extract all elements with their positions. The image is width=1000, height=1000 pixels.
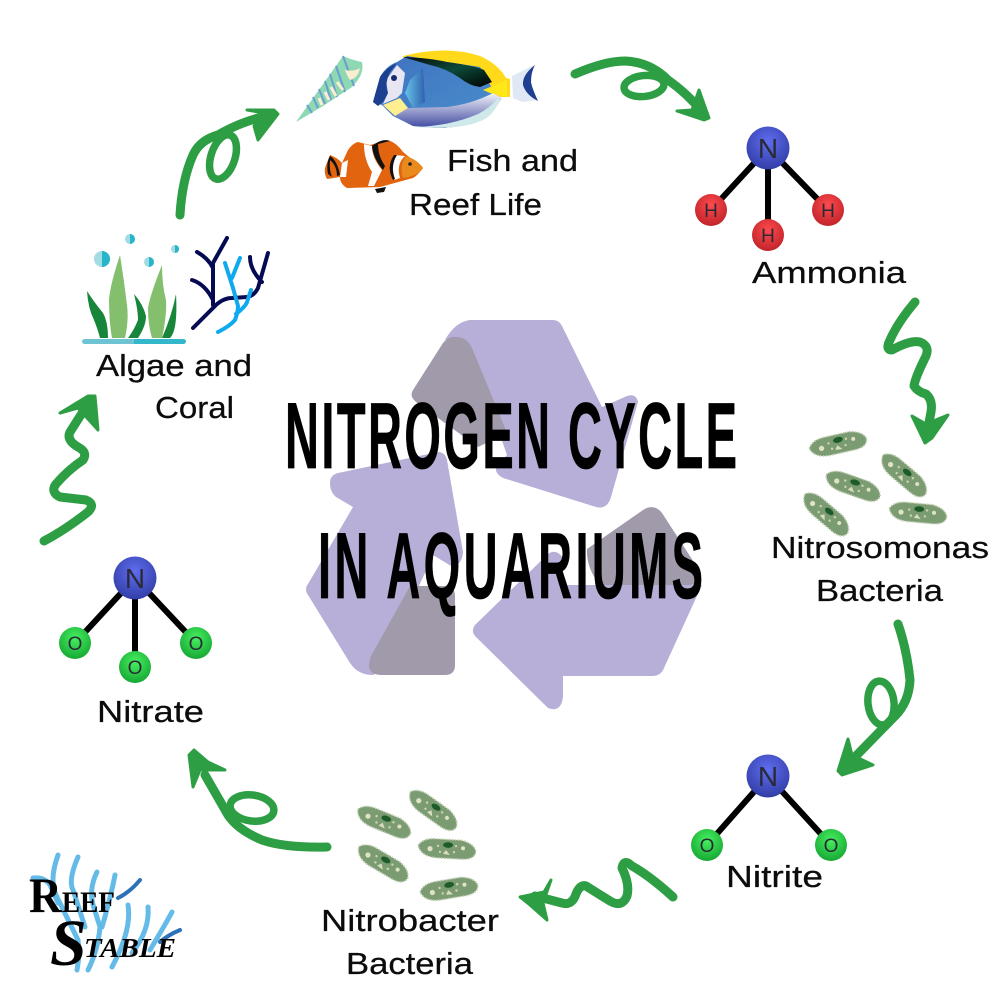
arrow: fish to ammonia xyxy=(575,61,709,120)
icon: nitrite molecule xyxy=(691,754,847,861)
logo: reef stable: REEF xyxy=(29,867,115,923)
icon: nitrate molecule xyxy=(59,556,212,683)
icon: nitrite molecule: O xyxy=(700,836,714,857)
label: nitrobacter bacteria: Bacteria xyxy=(346,946,474,981)
label: nitrosomonas bacteria xyxy=(771,530,989,608)
icon: nitrate molecule: O xyxy=(128,658,142,679)
arrow: nitrobacter to nitrate xyxy=(189,750,327,847)
label: ammonia: Ammonia xyxy=(752,255,907,290)
icon: ammonia molecule: N xyxy=(758,133,778,164)
title xyxy=(285,383,737,618)
icon: blue tang fish xyxy=(373,50,538,128)
icon: algae and sea grass xyxy=(82,234,186,344)
label: algae and coral xyxy=(96,348,252,425)
icon: coral xyxy=(192,238,268,332)
label: fish and reef life: Fish and xyxy=(447,143,578,178)
label: algae and coral: Coral xyxy=(155,390,234,425)
title: IN AQUARIUMS xyxy=(318,513,703,618)
label: fish and reef life: Reef Life xyxy=(409,187,542,222)
arrow: nitrosomonas to nitrite xyxy=(838,624,910,775)
icon: central recycling symbol xyxy=(306,320,702,709)
arrow: ammonia to nitrosomonas xyxy=(888,302,948,443)
icon: nitrite molecule: N xyxy=(758,761,778,792)
logo: reef stable: S xyxy=(50,907,87,980)
arrow: nitrate to algae xyxy=(44,396,98,541)
label: nitrosomonas bacteria: Bacteria xyxy=(816,573,944,608)
icon: ammonia molecule: H xyxy=(821,201,835,222)
icon: nitrate molecule: O xyxy=(189,634,203,655)
icon: nitrobacter bacteria xyxy=(353,786,479,905)
label: nitrite: Nitrite xyxy=(726,859,823,894)
arrow: nitrite to nitrobacter xyxy=(520,862,673,920)
icon: clownfish xyxy=(325,140,423,193)
icon: nitrate molecule: O xyxy=(68,634,82,655)
icon: seashell xyxy=(296,56,363,122)
arrow: algae to fish xyxy=(180,110,278,215)
label: nitrobacter bacteria: Nitrobacter xyxy=(321,903,499,938)
icon: ammonia molecule: H xyxy=(761,226,775,247)
label: nitrobacter bacteria xyxy=(321,903,499,981)
icon: nitrate molecule: N xyxy=(125,563,145,594)
icon: ammonia molecule xyxy=(695,126,844,251)
icon: nitrosomonas bacteria xyxy=(797,427,947,540)
icon: ammonia molecule: H xyxy=(704,201,718,222)
label: nitrosomonas bacteria: Nitrosomonas xyxy=(771,530,989,565)
label: nitrate: Nitrate xyxy=(97,694,204,729)
logo: reef stable: TABLE xyxy=(84,933,176,963)
logo: reef stable xyxy=(29,855,180,980)
title: NITROGEN CYCLE xyxy=(285,383,737,488)
label: algae and coral: Algae and xyxy=(96,348,252,383)
label: fish and reef life xyxy=(409,143,578,222)
icon: nitrite molecule: O xyxy=(824,836,838,857)
